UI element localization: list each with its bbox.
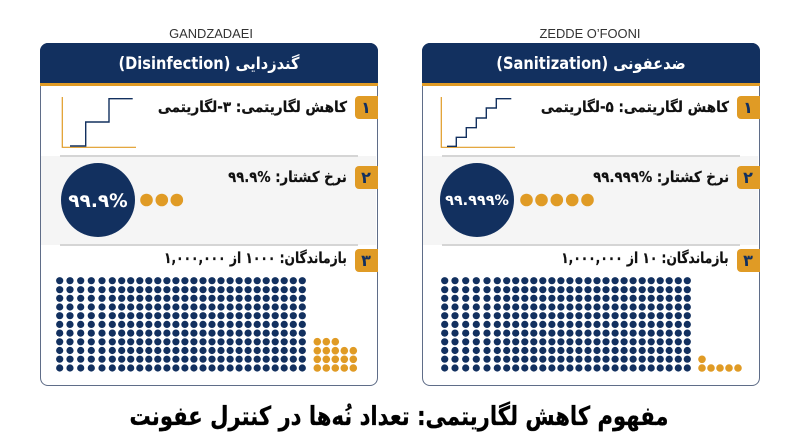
kill rate circle bbox=[61, 163, 135, 237]
panel header bbox=[422, 42, 760, 86]
survivors label: بازماندگان: ۱۰۰۰ از ۱,۰۰۰,۰۰۰ bbox=[164, 249, 347, 267]
log reduction label: کاهش لگاریتمی: ۵-لگاریتمی bbox=[541, 98, 729, 116]
dot grid: sanitization survivors bbox=[441, 277, 691, 372]
gold dots: 1000 survivors bbox=[314, 338, 358, 372]
panel: sanitization bbox=[422, 43, 760, 386]
badge 3 bbox=[736, 249, 760, 272]
kill rate circle: ۹۹.۹۹۹% bbox=[445, 193, 509, 209]
log reduction label: کاهش لگاریتمی: ۳-لگاریتمی bbox=[158, 98, 347, 116]
badge 1: ۱ bbox=[361, 98, 371, 116]
badge 1 bbox=[354, 96, 378, 118]
label: Gandzadaei: GANDZADAEI bbox=[169, 26, 253, 41]
panel header: ضدعفونی (Sanitization) bbox=[496, 54, 685, 72]
kill rate label: نرخ کشتار: %۹۹.۹۹۹ bbox=[593, 168, 729, 186]
five gold dots bbox=[520, 194, 594, 206]
badge 1: ۱ bbox=[743, 98, 753, 116]
panel background band bbox=[423, 156, 758, 244]
kill rate label: نرخ کشتار: %۹۹.۹ bbox=[228, 168, 347, 186]
panel header bbox=[40, 42, 378, 86]
panel: disinfection bbox=[40, 43, 378, 386]
label: Zedde O'fooni: ZEDDE O’FOONI bbox=[540, 26, 640, 41]
dot grid: disinfection survivors bbox=[56, 277, 306, 372]
badge 3 bbox=[354, 249, 378, 272]
badge 2 bbox=[736, 166, 760, 189]
gold dots: 10 survivors bbox=[698, 356, 742, 372]
badge 2: ۲ bbox=[361, 168, 371, 187]
badge 2 bbox=[354, 166, 378, 189]
badge 2: ۲ bbox=[743, 168, 753, 187]
kill rate circle bbox=[440, 163, 514, 237]
three gold dots bbox=[140, 194, 184, 206]
kill rate circle: ۹۹.۹% bbox=[68, 191, 128, 212]
survivors label: بازماندگان: ۱۰ از ۱,۰۰۰,۰۰۰ bbox=[562, 249, 729, 267]
panel background band bbox=[41, 156, 376, 244]
step chart: 3-log bbox=[62, 97, 136, 148]
badge 3: ۳ bbox=[743, 251, 753, 270]
title: مفهوم کاهش لگاریتمی: تعداد نُه‌ها در کنترل عفونت bbox=[130, 402, 668, 432]
badge 1 bbox=[736, 96, 760, 118]
panel header: گندزدایی (Disinfection) bbox=[118, 54, 299, 72]
step chart: 5-log bbox=[440, 97, 515, 148]
badge 3: ۳ bbox=[361, 251, 371, 270]
